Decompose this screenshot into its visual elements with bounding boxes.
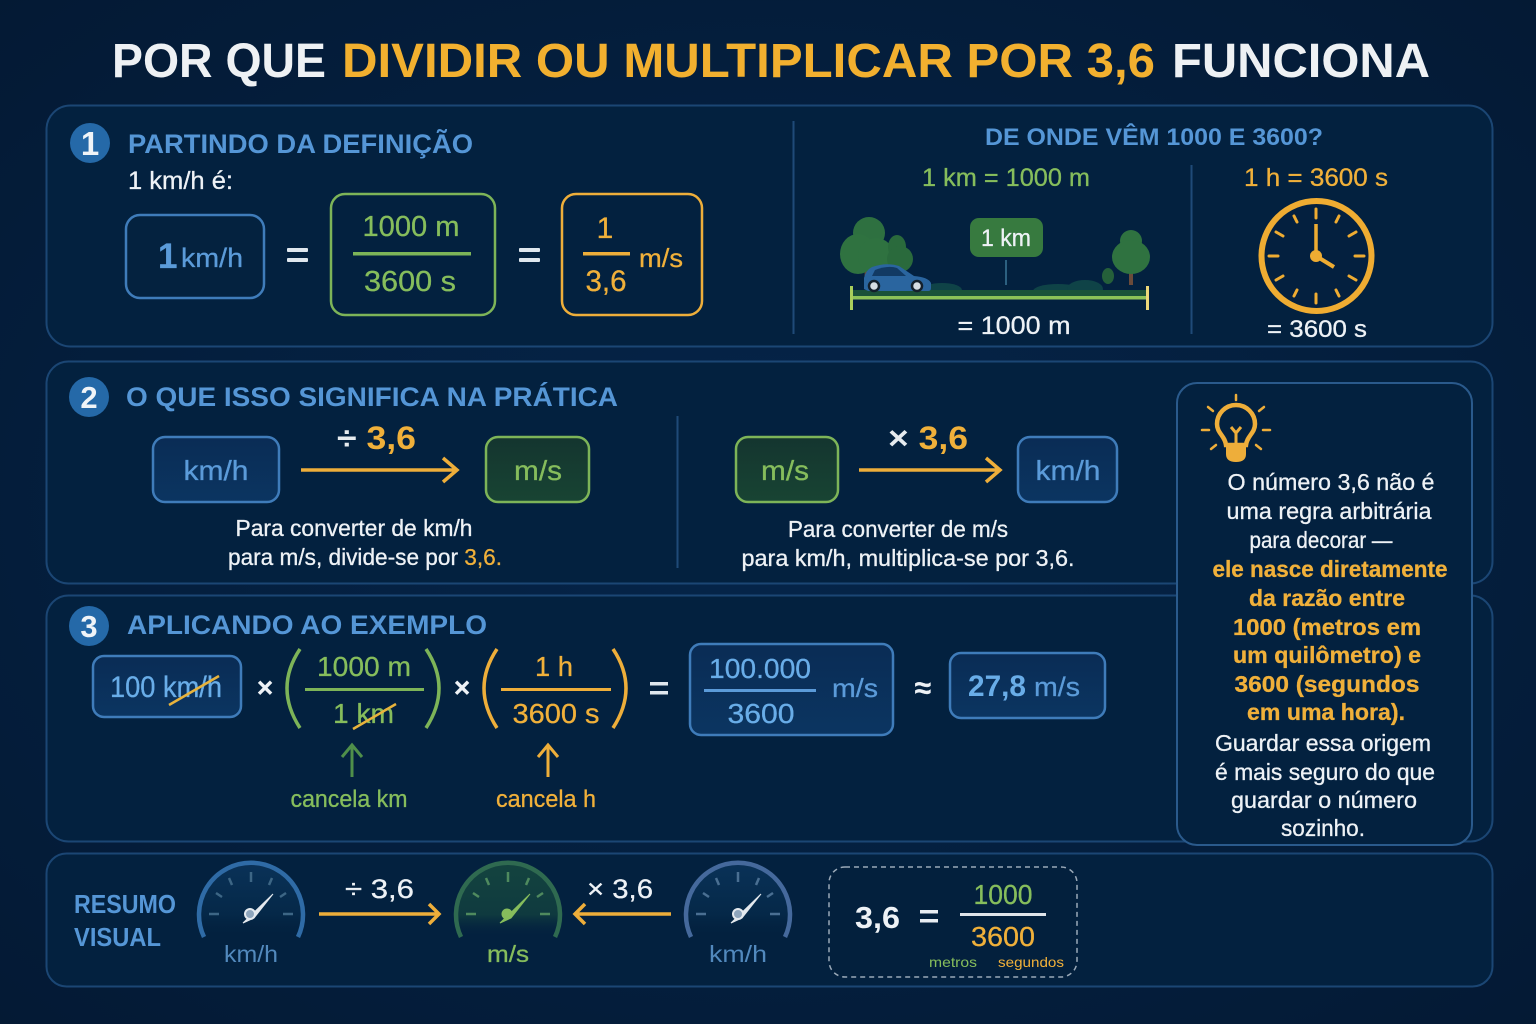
panel: resumo visual bbox=[46, 854, 1492, 986]
label: ÷ 3,6: ÷ 3,6 bbox=[337, 420, 416, 456]
box: 27,8 m/s: m/s bbox=[1034, 672, 1080, 702]
label: resumo visual bbox=[74, 889, 176, 952]
arrow bbox=[319, 904, 439, 924]
equals sign bbox=[519, 248, 540, 262]
label: cancela km: cancela km bbox=[290, 786, 408, 813]
text: callout body: Guardar essa origem bbox=[1215, 730, 1431, 756]
box: 3,6 = 1000 / 3600: segundos bbox=[998, 954, 1064, 970]
box: km/h bbox=[1018, 437, 1117, 502]
text: = 3600 s: = 3600 s bbox=[1267, 316, 1367, 343]
text: callout body: guardar o número bbox=[1231, 787, 1417, 813]
label: cancela h: cancela h bbox=[496, 786, 596, 813]
distance bar bbox=[850, 286, 1149, 310]
fraction: 1 h / 3600 s bbox=[484, 649, 626, 729]
label: resumo visual: RESUMO bbox=[74, 889, 176, 919]
gauge: km/h left bbox=[199, 863, 303, 937]
box: 3,6 = 1000 / 3600: 1000 bbox=[974, 879, 1032, 910]
arrow bbox=[575, 904, 671, 924]
text: callout body: um quilômetro) e bbox=[1233, 642, 1421, 668]
panel: o que isso significa na prática bbox=[46, 362, 1492, 584]
text: callout body: 1000 (metros em bbox=[1233, 614, 1421, 640]
heading 3: APLICANDO AO EXEMPLO bbox=[127, 610, 487, 640]
box: km/h: km/h bbox=[1036, 455, 1100, 486]
title: DIVIDIR OU MULTIPLICAR POR 3,6 bbox=[342, 35, 1155, 88]
box: 100 km/h: 100 km/h bbox=[110, 671, 222, 704]
label: × 3,6: × 3,6 bbox=[888, 420, 968, 456]
text: = 1000 m: = 1000 m bbox=[958, 312, 1070, 340]
text: callout body: é mais seguro do que bbox=[1215, 759, 1435, 785]
box: 1000 m / 3600 s: 1000 m bbox=[362, 211, 460, 243]
fraction: 1000 m / 1 km: 1000 m bbox=[317, 651, 411, 682]
box: 1 / 3,6 m/s: 1 bbox=[597, 212, 613, 245]
text: converter m/s para km/h: para km/h, multiplica-se por 3,6. bbox=[742, 545, 1074, 571]
equals sign bbox=[287, 248, 308, 262]
text: 1 km/h é: 1 km/h é: bbox=[128, 167, 233, 195]
text: converter m/s para km/h bbox=[742, 516, 1074, 571]
box: km/h bbox=[153, 437, 279, 502]
box: 1000 m / 3600 s: 3600 s bbox=[364, 266, 456, 298]
car bbox=[864, 264, 931, 291]
equals sign bbox=[650, 682, 668, 694]
panel: aplicando ao exemplo bbox=[46, 596, 1492, 842]
title: FUNCIONA bbox=[1172, 35, 1430, 88]
box: 3,6 = 1000 / 3600: 3,6 bbox=[855, 900, 900, 935]
box: 1 km/h: km/h bbox=[181, 243, 243, 273]
badge 1 bbox=[70, 123, 110, 163]
box: 27,8 m/s: 27,8 bbox=[968, 670, 1026, 703]
title: POR QUE bbox=[112, 35, 326, 88]
text: converter km/h para m/s: Para converter de km/h bbox=[236, 515, 472, 541]
box: 1 km/h bbox=[126, 215, 264, 298]
box: m/s bbox=[486, 437, 589, 502]
box: 1 / 3,6 m/s: 3,6 bbox=[586, 265, 626, 298]
box: 1000 m / 3600 s bbox=[331, 194, 495, 315]
gauge: km/h right bbox=[686, 863, 790, 937]
tree left bbox=[840, 217, 913, 285]
box: 3,6 = 1000 / 3600: 3600 bbox=[971, 921, 1035, 952]
box: 27,8 m/s bbox=[950, 653, 1105, 718]
box: 3,6 = 1000 / 3600: metros bbox=[929, 954, 977, 970]
text: callout body: O número 3,6 não é bbox=[1228, 469, 1434, 495]
box: 3,6 = 1000 / 3600 bbox=[829, 867, 1077, 977]
label: 1 km = 1000 m: 1 km = 1000 m bbox=[922, 164, 1090, 192]
label: × 3,6: × 3,6 bbox=[587, 874, 653, 904]
icon: clock bbox=[1262, 201, 1372, 311]
label: 1 h = 3600 s: 1 h = 3600 s bbox=[1244, 164, 1388, 192]
box: m/s: m/s bbox=[514, 455, 562, 486]
box: km/h: km/h bbox=[184, 455, 248, 486]
text: callout body bbox=[1212, 469, 1448, 841]
badge 2: 2 bbox=[80, 380, 98, 415]
heading 2: O QUE ISSO SIGNIFICA NA PRÁTICA bbox=[126, 381, 618, 412]
illustration: road with car and trees bbox=[840, 217, 1150, 310]
label: km/h: km/h bbox=[224, 941, 278, 967]
text: callout body: em uma hora). bbox=[1247, 699, 1405, 725]
fraction: 1000 m / 1 km: 1 km bbox=[333, 698, 394, 729]
box: 100.000 / 3600 m/s: m/s bbox=[832, 673, 878, 703]
panel: partindo da definição bbox=[46, 106, 1492, 346]
text: converter km/h para m/s bbox=[228, 515, 502, 570]
box: 1 km/h: 1 bbox=[158, 237, 177, 276]
box: m/s bbox=[736, 437, 838, 502]
text: callout body: 3600 (segundos bbox=[1234, 671, 1420, 697]
text: callout body: ele nasce diretamente bbox=[1212, 556, 1448, 582]
fraction: 1 h / 3600 s: 3600 s bbox=[512, 698, 600, 729]
label: ÷ 3,6: ÷ 3,6 bbox=[345, 874, 414, 904]
box: 100.000 / 3600 m/s bbox=[690, 644, 893, 735]
text: converter m/s para km/h: Para converter de m/s bbox=[788, 516, 1008, 542]
arrow: cancela h bbox=[538, 745, 558, 777]
label: resumo visual: VISUAL bbox=[74, 922, 161, 952]
label: m/s: m/s bbox=[487, 941, 529, 967]
distance sign: 1 km bbox=[981, 225, 1031, 252]
label: km/h: km/h bbox=[709, 941, 767, 967]
fraction: 1 h / 3600 s: 1 h bbox=[535, 651, 573, 682]
times: × bbox=[454, 672, 470, 703]
heading 1: PARTINDO DA DEFINIÇÃO bbox=[128, 128, 473, 159]
badge 1: 1 bbox=[81, 125, 99, 162]
arrow bbox=[301, 458, 457, 482]
subheading: de onde vêm: DE ONDE VÊM 1000 E 3600? bbox=[985, 123, 1323, 151]
bushes bbox=[922, 268, 1114, 298]
fraction: 1000 m / 1 km bbox=[287, 649, 439, 729]
times: × bbox=[257, 672, 273, 703]
text: callout body: sozinho. bbox=[1281, 815, 1365, 841]
text: converter km/h para m/s: para m/s, divide-se por 3,6. bbox=[228, 544, 502, 570]
icon: light bulb bbox=[1202, 395, 1270, 462]
box: 100.000 / 3600 m/s: 3600 bbox=[728, 698, 794, 729]
text: callout body: uma regra arbitrária bbox=[1226, 498, 1432, 524]
arrow bbox=[859, 458, 1000, 482]
badge 3: 3 bbox=[80, 609, 98, 644]
title bbox=[112, 35, 1430, 88]
distance sign bbox=[970, 218, 1043, 285]
box: m/s: m/s bbox=[761, 455, 809, 486]
approx sign: ≈ bbox=[915, 672, 931, 705]
tree right bbox=[1112, 230, 1150, 285]
gauge: m/s bbox=[456, 863, 560, 937]
box: 1 / 3,6 m/s bbox=[562, 194, 702, 315]
text: callout body: da razão entre bbox=[1249, 585, 1405, 611]
text: callout body: para decorar — bbox=[1250, 527, 1392, 553]
box: 100 km/h bbox=[93, 656, 241, 717]
badge 2 bbox=[69, 377, 109, 417]
arrow: cancela km bbox=[342, 745, 362, 777]
panel: callout bbox=[1177, 383, 1472, 845]
badge 3 bbox=[69, 606, 109, 646]
box: 1 / 3,6 m/s: m/s bbox=[639, 243, 683, 273]
box: 100.000 / 3600 m/s: 100.000 bbox=[709, 653, 811, 684]
